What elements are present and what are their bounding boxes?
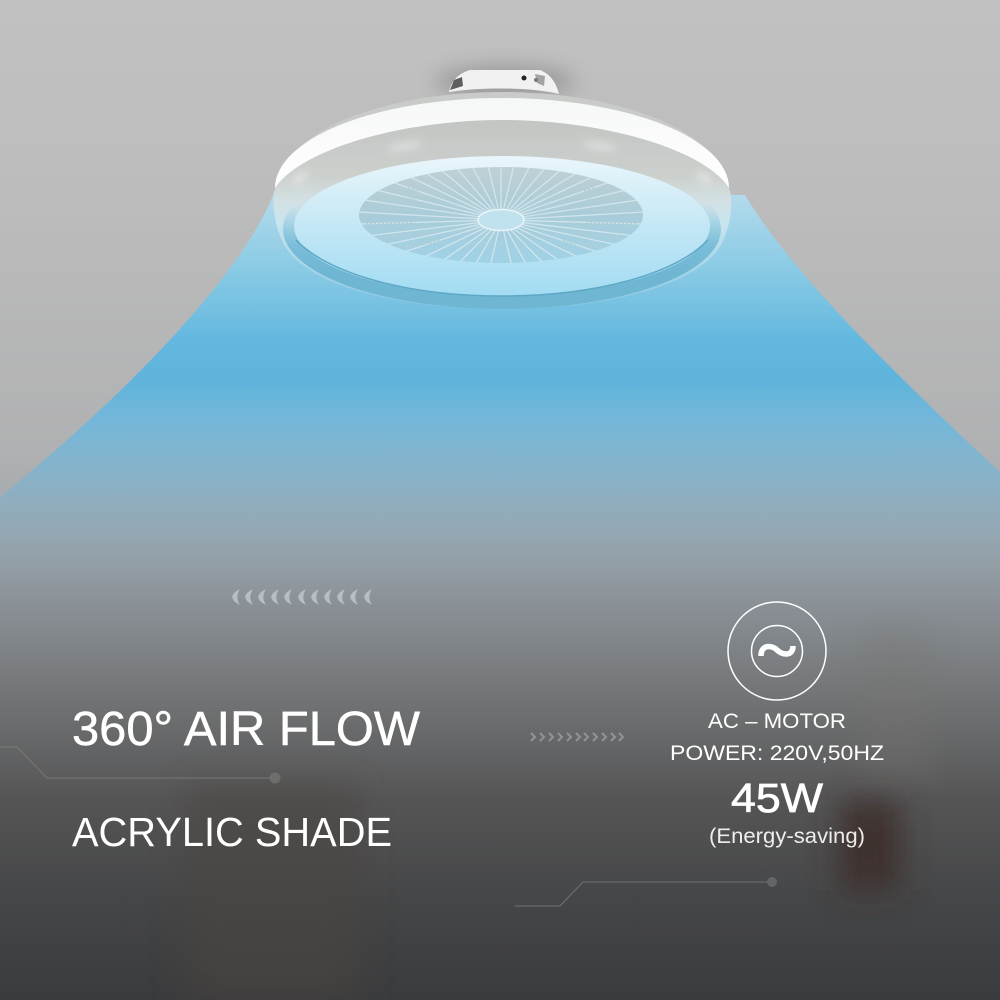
left chevron row bbox=[233, 591, 370, 603]
subheading: acrylic shade: ACRYLIC SHADE bbox=[72, 809, 392, 855]
label: AC motor: AC – MOTOR bbox=[708, 710, 846, 733]
central hub bbox=[478, 210, 524, 230]
circuit line right bbox=[515, 877, 777, 906]
blue air flow cone bbox=[0, 190, 1000, 620]
inner shade disk bbox=[294, 156, 710, 296]
label: energy saving: (Energy-saving) bbox=[709, 825, 865, 848]
fan blades bbox=[358, 165, 644, 267]
lit ring band bbox=[275, 98, 729, 278]
ceiling fan with light bbox=[274, 66, 731, 309]
wattage: 45W bbox=[731, 775, 823, 821]
housing body bbox=[274, 120, 731, 309]
label: power: POWER: 220V,50HZ bbox=[670, 742, 884, 765]
outer rim bbox=[280, 92, 724, 280]
heading: 360 air flow: 360° AIR FLOW bbox=[72, 703, 421, 756]
mounting bracket bbox=[449, 70, 559, 94]
lower blue rim bbox=[283, 149, 721, 309]
body highlights bbox=[289, 139, 715, 188]
right chevron row bbox=[531, 733, 623, 741]
ceiling shadow around mount bbox=[435, 66, 575, 98]
fan grille bbox=[358, 165, 644, 267]
circuit line left bbox=[0, 747, 280, 784]
disk bottom edge shadow bbox=[296, 240, 708, 296]
icon: AC motor bbox=[728, 602, 826, 700]
